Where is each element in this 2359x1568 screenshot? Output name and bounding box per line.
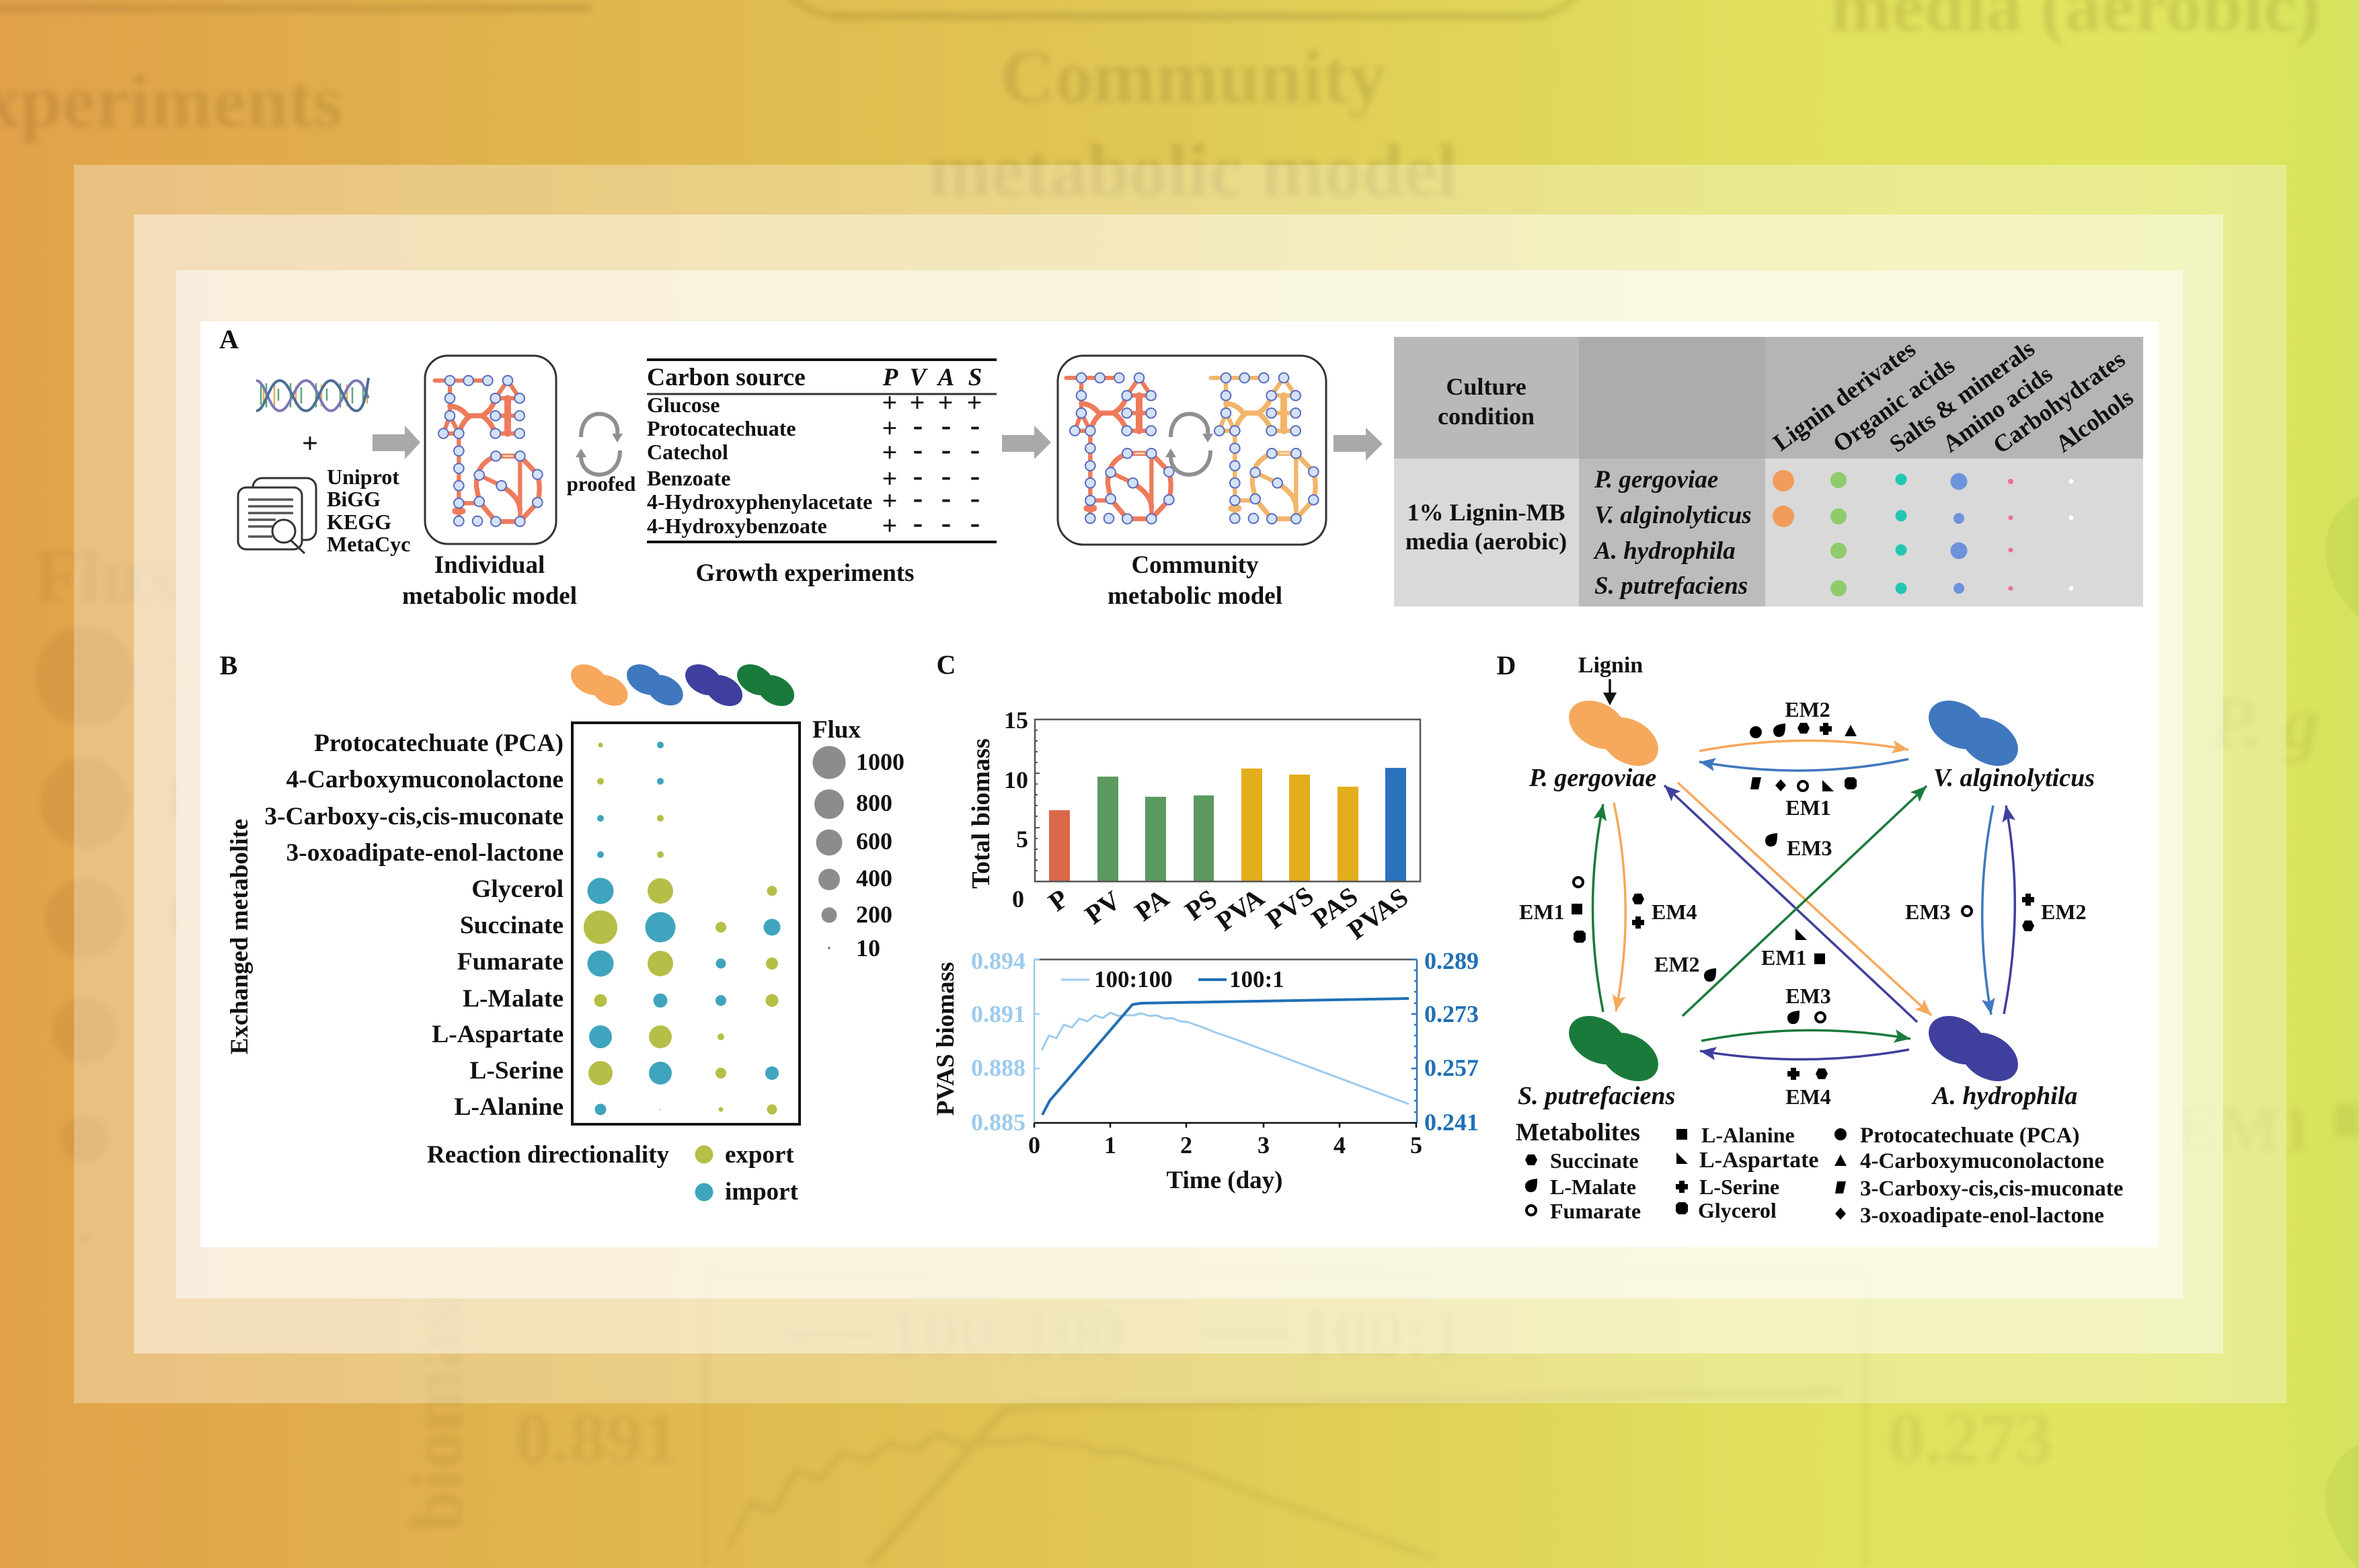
metabolite row labels: [264, 730, 564, 1121]
enlarged faded copy of panel A in the background: metabolic model: [928, 129, 1458, 212]
table: growth experiments: +: [882, 485, 897, 516]
exchange metabolite labels: EM4: [1652, 900, 1697, 924]
frame layer 3: [176, 270, 2183, 1298]
icon: proofed cycle: [576, 414, 623, 475]
metabolites legend: [1516, 1119, 2123, 1228]
table: culture condition: Carbohydrates: [1988, 346, 2130, 459]
arrow: to community model: [1002, 426, 1051, 459]
enlarged faded copy of lower panels in the background: 1000: [166, 633, 313, 715]
exchange metabolite labels: EM2: [1785, 697, 1830, 721]
individual model caption: [402, 551, 577, 610]
table: growth experiments: A: [937, 364, 954, 391]
organism labels: V. alginolyticus: [1933, 764, 2095, 792]
enlarged faded copy of lower panels in the background: 0.891: [514, 1398, 680, 1479]
organism labels: [1518, 764, 2095, 1110]
enlarged faded copy of lower panels in the background: 600: [166, 874, 276, 955]
table: culture condition: V. alginolyticus: [1594, 502, 1752, 529]
database list: MetaCyc: [327, 532, 410, 556]
line chart: PVAS biomass: 0: [1028, 1132, 1040, 1159]
flux size legend: 10: [856, 935, 880, 962]
reaction directionality legend: import: [725, 1178, 799, 1206]
community model caption: metabolic model: [1108, 582, 1282, 610]
flux size legend: 400: [856, 865, 892, 892]
table: growth experiments: -: [941, 481, 951, 514]
line chart: PVAS biomass: [932, 947, 1479, 1194]
flux size legend: 600: [856, 828, 892, 855]
individual model caption: metabolic model: [402, 582, 577, 610]
exchange metabolite labels: EM1: [1761, 945, 1807, 970]
enlarged faded copy of lower panels in the background: [34, 535, 2358, 1565]
table: growth experiments: +: [882, 510, 897, 541]
bar chart: total biomass: [967, 707, 1420, 945]
line chart: PVAS biomass: 100:100: [1094, 966, 1173, 992]
table: growth experiments: -: [941, 459, 951, 492]
bar chart: total biomass: PA: [1129, 883, 1174, 927]
table: growth experiments: -: [913, 433, 923, 466]
metabolites legend: 3-oxoadipate-enol-lactone: [1860, 1204, 2104, 1228]
enlarged faded copy of lower panels in the background: 0.273: [1888, 1398, 2053, 1479]
reaction directionality legend: export: [725, 1141, 794, 1169]
flux size legend: Flux: [812, 716, 861, 744]
bar chart: total biomass: P: [1043, 883, 1074, 917]
table: growth experiments: -: [941, 433, 951, 466]
line chart: PVAS biomass: 100:1: [1229, 966, 1284, 992]
bar chart: total biomass: PV: [1079, 885, 1126, 930]
metabolites legend: Succinate: [1550, 1148, 1639, 1173]
frame layer 2: [134, 214, 2223, 1354]
growth experiments caption: Growth experiments: [695, 559, 915, 587]
table: growth experiments: Glucose: [647, 393, 720, 417]
metabolite row labels: L-Alanine: [454, 1093, 564, 1121]
table: growth experiments: +: [938, 387, 953, 418]
panel A label: A: [219, 324, 239, 354]
flux size legend: 200: [856, 901, 892, 928]
faded organism silhouettes at right edge: [2325, 496, 2359, 1568]
table: growth experiments: +: [882, 463, 897, 494]
plus sign: +: [302, 428, 318, 459]
line chart: PVAS biomass: 4: [1333, 1132, 1346, 1159]
line chart: PVAS biomass: 0.894: [971, 947, 1026, 974]
icon: DNA helix: [256, 378, 369, 411]
table: growth experiments: 4-Hydroxybenzoate: [647, 514, 827, 538]
panel C label: C: [937, 650, 956, 680]
white figure panel: [200, 321, 2159, 1247]
table: culture condition: P. gergoviae: [1594, 466, 1718, 494]
community model caption: Community: [1131, 551, 1259, 579]
table: growth experiments: +: [882, 413, 897, 443]
table: growth experiments: +: [882, 387, 897, 418]
exchange metabolite labels: EM4: [1785, 1085, 1831, 1109]
reaction directionality legend: Reaction directionality: [427, 1141, 670, 1169]
table: growth experiments: -: [970, 481, 980, 514]
individual model caption: Individual: [434, 551, 545, 579]
exchange metabolite labels: EM3: [1905, 900, 1951, 924]
table: growth experiments: 4-Hydroxyphenylacetate: [647, 489, 872, 514]
metabolites legend: Metabolites: [1516, 1119, 1640, 1146]
panel D label: D: [1497, 650, 1516, 680]
exchange metabolite labels: EM3: [1785, 984, 1831, 1008]
arrow: to culture table: [1333, 428, 1383, 461]
table: growth experiments: +: [910, 387, 925, 418]
table: culture condition: A. hydrophila: [1593, 537, 1736, 565]
metabolite row labels: Fumarate: [457, 948, 564, 976]
enlarged faded copy of lower panels in the background: P. g: [2207, 681, 2319, 765]
metabolites legend: Protocatechuate (PCA): [1860, 1124, 2080, 1148]
table: growth experiments: -: [913, 409, 923, 442]
bar chart: total biomass: 5: [1016, 826, 1028, 853]
metabolites legend: Glycerol: [1698, 1198, 1777, 1222]
organism labels: P. gergoviae: [1529, 764, 1656, 792]
database list: Uniprot: [327, 465, 399, 489]
table: growth experiments: Carbon source: [647, 364, 806, 391]
table: growth experiments: Catechol: [647, 440, 728, 464]
metabolite row labels: L-Serine: [469, 1057, 564, 1085]
arrow: to individual model: [373, 426, 420, 459]
table: growth experiments: +: [967, 387, 982, 418]
table: growth experiments: Protocatechuate: [647, 416, 796, 440]
bar chart: total biomass: PVS: [1260, 880, 1319, 935]
enlarged faded copy of lower panels in the background: Flux: [34, 535, 180, 618]
metabolite row labels: L-Malate: [463, 985, 564, 1013]
line chart: PVAS biomass: 0.257: [1424, 1054, 1479, 1081]
table: culture condition: media (aerobic): [1405, 528, 1567, 555]
community model caption: [1108, 551, 1282, 610]
line chart: PVAS biomass: 0.241: [1424, 1109, 1479, 1136]
enlarged faded copy of panel A in the background: [0, 0, 2320, 212]
exchange metabolite labels: [1519, 697, 2087, 1109]
metabolites legend: 4-Carboxymuconolactone: [1860, 1149, 2104, 1173]
line chart: PVAS biomass: 3: [1258, 1132, 1270, 1159]
bar chart: total biomass: 15: [1004, 707, 1028, 734]
metabolites legend: Fumarate: [1550, 1199, 1641, 1223]
organism labels: A. hydrophila: [1931, 1082, 2077, 1110]
enlarged faded copy of lower panels in the background: 800: [166, 758, 276, 839]
frame layer 1: [74, 165, 2286, 1403]
panel B label: B: [220, 650, 237, 680]
bar chart: total biomass: Total biomass: [967, 738, 995, 889]
bar chart: total biomass: 0: [1012, 886, 1024, 912]
bar chart: total biomass: PS: [1180, 884, 1223, 927]
table: growth experiments: V: [910, 364, 929, 391]
community metabolic model box: [1058, 356, 1326, 545]
metabolites legend: L-Alanine: [1701, 1123, 1795, 1147]
table: growth experiments: P: [882, 364, 898, 391]
exchange metabolite labels: EM2: [1654, 952, 1700, 976]
table: culture condition: Alcohols: [2050, 384, 2138, 457]
enlarged faded copy of lower panels in the background: EM1: [2175, 1093, 2313, 1165]
line chart: PVAS biomass: 0.273: [1424, 1001, 1479, 1027]
exchange metabolite labels: EM1: [1785, 795, 1831, 820]
database list: BiGG: [327, 487, 381, 511]
metabolites legend: L-Malate: [1550, 1175, 1636, 1199]
organisms: [1560, 691, 2027, 1091]
metabolite row labels: Protocatechuate (PCA): [314, 730, 564, 757]
line chart: PVAS biomass: Time (day): [1166, 1167, 1283, 1194]
metabolite symbols on arrows: [1572, 723, 2034, 1080]
line chart: PVAS biomass: 0.289: [1424, 947, 1479, 974]
table: growth experiments: Benzoate: [647, 466, 730, 490]
table: growth experiments: -: [913, 481, 923, 514]
enlarged faded copy of lower panels in the background: biomass: [395, 1272, 479, 1532]
metabolites legend: 3-Carboxy-cis,cis-muconate: [1860, 1177, 2123, 1201]
line chart: PVAS biomass: 5: [1410, 1132, 1422, 1159]
table: growth experiments: -: [913, 459, 923, 492]
metabolite row labels: Succinate: [460, 912, 564, 939]
flux size legend: 800: [856, 789, 892, 816]
proofed label: proofed: [567, 472, 635, 496]
organism labels: S. putrefaciens: [1518, 1082, 1675, 1110]
line chart: PVAS biomass: PVAS biomass: [932, 962, 960, 1115]
metabolite row labels: 3-Carboxy-cis,cis-muconate: [264, 803, 564, 830]
enlarged faded copy of lower panels in the background: 100:100: [888, 1293, 1125, 1372]
reaction directionality legend: [427, 1141, 799, 1206]
table: culture condition: Salts & minerals: [1884, 335, 2040, 457]
table: growth experiments: -: [970, 506, 980, 539]
database list: [327, 465, 410, 556]
table: culture condition: condition: [1438, 403, 1535, 430]
line chart: PVAS biomass: 0.891: [971, 1001, 1026, 1027]
table: growth experiments: -: [970, 433, 980, 466]
exchange metabolite labels: EM2: [2041, 900, 2087, 924]
line chart: PVAS biomass: 0.885: [971, 1109, 1026, 1136]
exchange arrows: [1592, 740, 2015, 1060]
database list: KEGG: [327, 510, 391, 534]
bar chart: total biomass: PVAS: [1342, 881, 1414, 945]
table: culture condition: Organic acids: [1828, 352, 1960, 457]
bubble chart: [572, 723, 800, 1124]
table: culture condition: 1% Lignin-MB: [1407, 499, 1565, 526]
flux size legend: [812, 716, 904, 962]
metabolites legend: L-Serine: [1699, 1175, 1779, 1199]
exchange metabolite labels: EM1: [1519, 900, 1565, 924]
table: growth experiments: -: [970, 409, 980, 442]
line chart: PVAS biomass: 2: [1180, 1132, 1192, 1159]
table: culture condition: Lignin derivates: [1768, 336, 1921, 456]
table: growth experiments: -: [941, 506, 951, 539]
enlarged faded copy of panel A in the background: Community: [1001, 36, 1386, 119]
table: growth experiments: -: [941, 409, 951, 442]
bar chart: total biomass: PVA: [1210, 882, 1270, 937]
y axis title: exchanged metabolite: Exchanged metabolite: [226, 819, 254, 1054]
table: culture condition: Culture: [1446, 373, 1526, 400]
table: growth experiments: S: [968, 364, 982, 391]
exchange metabolite labels: EM3: [1787, 836, 1832, 860]
individual metabolic model box: [425, 356, 556, 544]
bar chart: total biomass: 10: [1004, 767, 1028, 793]
bar chart: total biomass: PAS: [1306, 881, 1363, 934]
metabolite row labels: Glycerol: [471, 875, 564, 903]
line chart: PVAS biomass: 0.888: [971, 1054, 1026, 1081]
table: growth experiments: +: [882, 437, 897, 467]
icon: document search: [238, 478, 316, 553]
line chart: PVAS biomass: 1: [1104, 1132, 1116, 1159]
lignin input: [1578, 653, 1643, 705]
enlarged faded copy of lower panels in the background: 100:1: [1297, 1293, 1463, 1372]
metabolite row labels: 4-Carboxymuconolactone: [286, 766, 564, 793]
lignin input: Lignin: [1578, 653, 1643, 678]
flux size legend: 1000: [856, 748, 904, 775]
table: growth experiments: [647, 360, 997, 542]
table: culture condition: Amino acids: [1937, 360, 2057, 457]
table: growth experiments: -: [970, 459, 980, 492]
metabolite row labels: L-Aspartate: [432, 1021, 564, 1048]
bacteria icons header: [566, 658, 800, 712]
metabolites legend: L-Aspartate: [1699, 1148, 1819, 1173]
table: culture condition: [1394, 335, 2143, 606]
metabolite row labels: 3-oxoadipate-enol-lactone: [286, 839, 564, 867]
table: growth experiments: -: [913, 506, 923, 539]
table: culture condition: S. putrefaciens: [1594, 572, 1748, 600]
